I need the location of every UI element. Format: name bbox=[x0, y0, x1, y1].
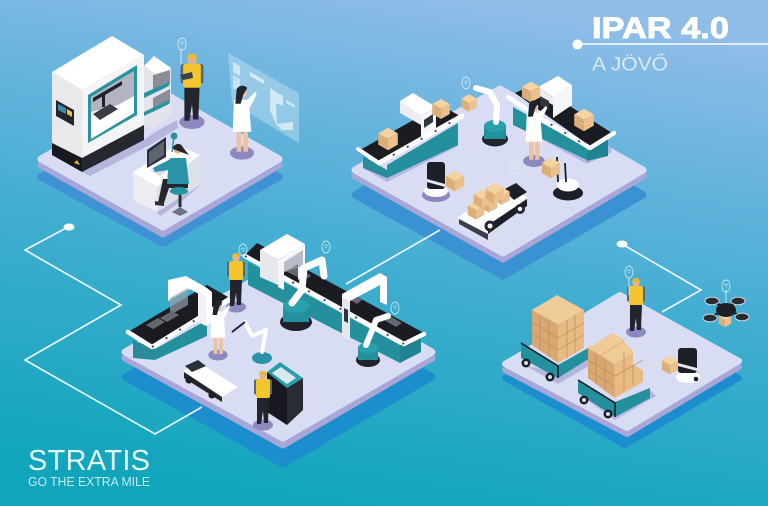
control console bbox=[267, 362, 303, 425]
right conveyor bbox=[508, 76, 614, 161]
hologram screen bbox=[228, 53, 299, 143]
arch scanner A bbox=[260, 234, 305, 290]
delivery drone bbox=[703, 280, 749, 327]
platform 4 base bbox=[505, 295, 739, 434]
back conveyor line bbox=[244, 243, 426, 363]
title: IPAR 4.0 bbox=[592, 12, 729, 45]
left conveyor bbox=[358, 93, 462, 178]
arch scanner B bbox=[342, 273, 387, 340]
worker at line bbox=[226, 244, 247, 312]
panel: packaging and logistics platform bbox=[355, 76, 643, 259]
forklift robot bbox=[542, 157, 583, 200]
operator bbox=[253, 371, 273, 430]
robot arm with box bbox=[461, 77, 508, 146]
technician with tablet bbox=[178, 38, 205, 129]
mobile robot left bbox=[422, 162, 464, 202]
robot arm small bbox=[356, 316, 388, 367]
object shadows on floor bbox=[363, 118, 612, 182]
side cabinet bbox=[144, 56, 171, 129]
panel: assembly line platform bbox=[125, 234, 432, 445]
scientist bbox=[523, 100, 547, 167]
platform 1 base bbox=[41, 91, 279, 234]
platform 3 base bbox=[125, 266, 432, 445]
platform drop shadows bbox=[40, 108, 739, 464]
platform 2 base bbox=[355, 89, 643, 259]
wifi markers bbox=[322, 241, 399, 314]
AGV with parcels bbox=[458, 162, 527, 240]
scientist at line bbox=[208, 300, 230, 360]
connector line: left zigzag bbox=[25, 224, 202, 434]
logo bbox=[28, 445, 150, 489]
title rule bbox=[572, 40, 768, 50]
title block bbox=[572, 12, 768, 76]
cart two with stacked boxes bbox=[578, 333, 656, 420]
subtitle: A JÖVŐ bbox=[592, 52, 668, 76]
robot arm large bbox=[280, 260, 324, 331]
left conveyor line bbox=[128, 276, 228, 360]
panel: design and control platform bbox=[41, 36, 299, 234]
3D printer machine bbox=[52, 36, 144, 172]
cart one with stacked boxes bbox=[521, 295, 596, 384]
panel: warehouse platform bbox=[505, 266, 749, 434]
warehouse worker bbox=[625, 266, 646, 338]
flatbed AGV bbox=[183, 360, 238, 402]
carrier robot bbox=[662, 348, 700, 383]
seated engineer bbox=[153, 144, 189, 216]
tagline: GO THE EXTRA MILE bbox=[28, 475, 150, 489]
brand name: STRATIS bbox=[28, 445, 150, 477]
mobile arm robot bbox=[232, 322, 272, 364]
desk with monitor bbox=[133, 132, 200, 212]
scientist at hologram bbox=[230, 86, 257, 160]
connector line: right bbox=[616, 240, 701, 312]
object shadows on floor bbox=[82, 120, 204, 216]
connector line: centre bbox=[346, 230, 440, 284]
